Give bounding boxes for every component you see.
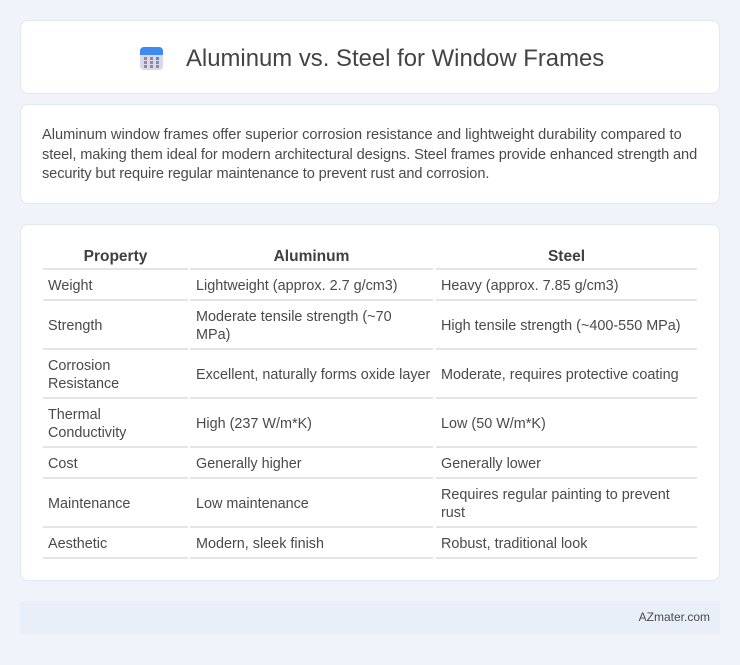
row: weight: Weight <box>48 278 93 294</box>
comparison table: Low maintenance <box>196 496 309 512</box>
comparison table: High (237 W/m*K) <box>196 416 312 432</box>
comparison table: Moderate tensile strength (~70 <box>196 309 392 325</box>
intro text: steel, making them ideal for modern architectural designs. Steel frames provide enhanced strength and <box>42 147 697 163</box>
row: corrosion resistance: Corrosion <box>48 358 110 374</box>
footer <box>20 601 720 634</box>
row: corrosion resistance <box>48 358 119 392</box>
intro text: security but require regular maintenance to prevent rust and corrosion. <box>42 166 489 182</box>
row: thermal conductivity: Thermal <box>48 407 101 423</box>
header: property: Property <box>84 248 147 265</box>
comparison table: Heavy (approx. 7.85 g/cm3) <box>441 278 619 294</box>
comparison table: Generally higher <box>196 456 302 472</box>
intro text <box>42 127 697 182</box>
row: strength: Strength <box>48 318 102 334</box>
row: corrosion resistance: Resistance <box>48 376 119 392</box>
comparison table: Moderate, requires protective coating <box>441 367 679 383</box>
title: Aluminum vs. Steel for Window Frames <box>186 45 604 72</box>
footer source: AZmater.com <box>639 610 710 624</box>
row: thermal conductivity: Conductivity <box>48 425 126 441</box>
title card <box>20 20 720 94</box>
comparison table: Robust, traditional look <box>441 536 587 552</box>
intro text: Aluminum window frames offer superior corrosion resistance and lightweight durability compared to <box>42 127 682 143</box>
intro card <box>20 104 720 204</box>
comparison table: High tensile strength (~400-550 MPa) <box>441 318 681 334</box>
comparison table: Requires regular painting to prevent <box>441 487 670 503</box>
comparison table: MPa) <box>196 327 230 343</box>
header: aluminum: Aluminum <box>274 248 349 265</box>
row: maintenance: Maintenance <box>48 496 130 512</box>
icon: calendar <box>140 47 163 70</box>
comparison table: rust <box>441 505 465 521</box>
row: aesthetic: Aesthetic <box>48 536 107 552</box>
comparison table: Modern, sleek finish <box>196 536 324 552</box>
row: cost: Cost <box>48 456 78 472</box>
comparison table: Generally lower <box>441 456 541 472</box>
header: steel: Steel <box>548 248 585 265</box>
comparison table: Low (50 W/m*K) <box>441 416 546 432</box>
comparison table: Excellent, naturally forms oxide layer <box>196 367 430 383</box>
row: thermal conductivity <box>48 407 126 441</box>
table card <box>20 224 720 581</box>
comparison table: Lightweight (approx. 2.7 g/cm3) <box>196 278 398 294</box>
